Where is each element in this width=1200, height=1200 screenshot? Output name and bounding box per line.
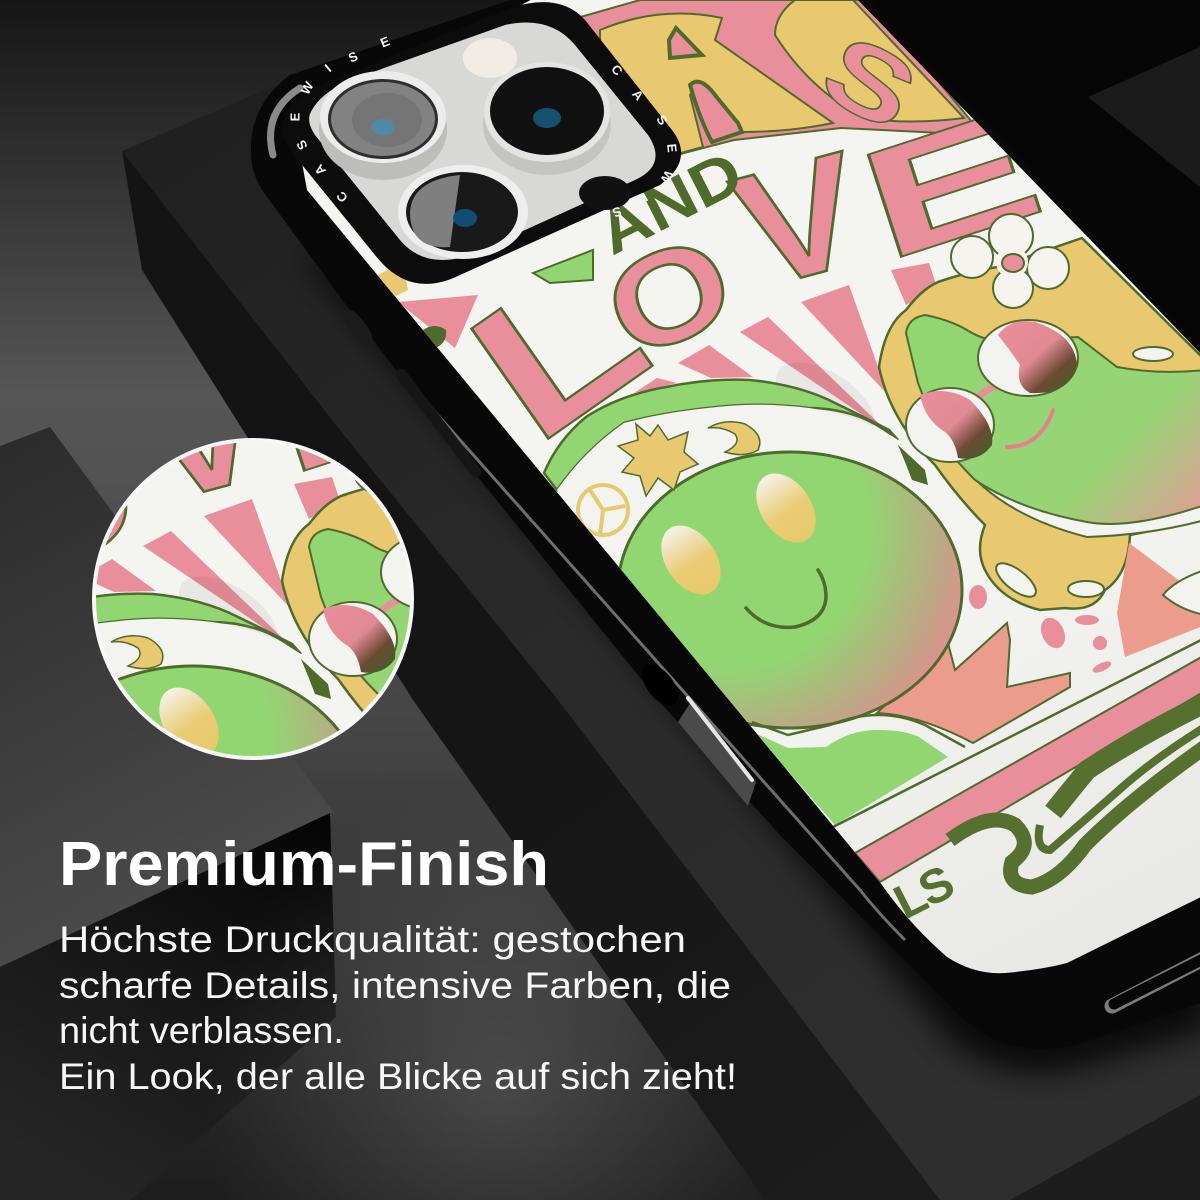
lens top left (319, 71, 447, 180)
microphone hole (579, 176, 631, 210)
camera glass (309, 22, 656, 260)
lettering E: E (842, 75, 1060, 294)
charging port opening (1114, 958, 1200, 1004)
frame lettering: E (576, 218, 590, 236)
pink triangle counter (669, 28, 702, 58)
frame lettering: S (346, 48, 360, 66)
case gap highlight (271, 88, 300, 155)
frame lettering: W (297, 78, 317, 97)
phone case (251, 0, 1200, 1049)
pink stripe (855, 655, 1200, 882)
frame lettering: W (657, 168, 677, 187)
frame lettering: E (664, 143, 680, 153)
small lettering: LS (886, 856, 962, 930)
charging port (1112, 958, 1200, 1006)
smiley eyes (649, 463, 828, 605)
frame lettering (288, 33, 680, 236)
body text: nicht verblassen. (59, 1010, 344, 1051)
pink arch (690, 82, 742, 142)
frog rim (976, 482, 1200, 538)
frame lettering: S (610, 203, 624, 221)
body text: Ein Look, der alle Blicke auf sich zieht! (59, 1056, 737, 1097)
lower left step (0, 427, 336, 1200)
body text: Höchste Druckqualität: gestochen (59, 919, 686, 960)
face and frog junction (898, 445, 928, 485)
headband (557, 405, 905, 560)
frame lettering: C (333, 188, 351, 205)
body text: scharfe Details, intensive Farben, die (59, 965, 731, 1006)
lettering AND: AND (587, 138, 754, 268)
ray reflection (764, 347, 886, 453)
sunglasses (906, 320, 1078, 462)
phone shadow (300, 250, 1200, 1073)
right swirl (1163, 570, 1200, 615)
camera island (282, 2, 681, 284)
peace sign (578, 485, 628, 535)
frame lettering: E (288, 112, 302, 121)
green heart (533, 250, 593, 283)
small dark curl (423, 326, 446, 348)
frame lettering: S (653, 112, 671, 128)
button notch (635, 658, 685, 712)
artwork (250, 0, 1200, 1010)
yellow blob holes (991, 347, 1173, 603)
frog smile (1007, 410, 1053, 447)
star (618, 424, 698, 496)
green swirl (950, 703, 1200, 887)
sun rays (634, 263, 937, 433)
floor glow (200, 780, 800, 1200)
frame lettering: S (293, 137, 311, 153)
green cloud (755, 730, 948, 825)
lettering S: S (805, 12, 935, 152)
yellow hair (879, 238, 1200, 610)
lens top right (483, 62, 611, 175)
pink halftone right (1117, 543, 1200, 657)
cap (544, 380, 898, 490)
flower (951, 214, 1069, 308)
pink polka dots (969, 585, 1113, 675)
frame lettering: A (629, 87, 647, 104)
case body (251, 0, 1200, 1049)
silver side button (678, 698, 756, 806)
body text (59, 919, 737, 1097)
frog face (906, 315, 1200, 524)
volume notch (338, 305, 378, 349)
top pink backing (580, 0, 986, 156)
yellow lettering left (600, 14, 833, 160)
lettering V: V (717, 117, 881, 324)
smiley face (618, 452, 962, 728)
green rule (833, 638, 1200, 827)
smile (746, 570, 826, 627)
frame lettering: A (311, 161, 329, 178)
paper base (250, 0, 1200, 1010)
moon (708, 422, 760, 455)
case glossy rim (420, 395, 905, 940)
right background block (1088, 47, 1200, 187)
camera frame (282, 2, 681, 284)
long side button (401, 374, 476, 472)
lettering L: L (434, 218, 683, 482)
lens bottom (398, 165, 528, 259)
yellow corner chip (378, 269, 408, 296)
cloud outline (752, 715, 965, 747)
frame lettering: C (608, 62, 626, 79)
zoom detail circle (0, 204, 653, 1200)
flash (463, 38, 517, 78)
phone print illustration (250, 0, 1200, 1010)
frame lettering: I (322, 61, 334, 75)
frame lettering: I (640, 190, 650, 204)
yellow lettering right (775, 0, 964, 122)
pink corner under camera (398, 295, 478, 348)
pink halftone left (877, 623, 1070, 743)
lettering O: O (584, 206, 754, 388)
frame lettering: E (378, 33, 392, 51)
heading: Premium-Finish (59, 830, 549, 899)
